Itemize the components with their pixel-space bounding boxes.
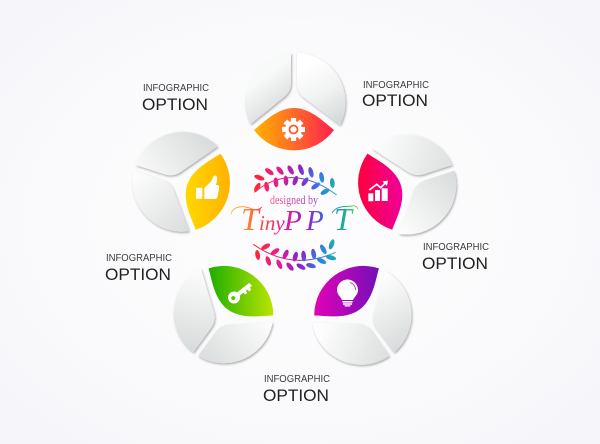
text: Tiny PPT: T <box>241 201 261 237</box>
label: option top-right <box>362 80 429 110</box>
circle 2: right pink <box>348 122 469 239</box>
label: option top-right: INFOGRAPHIC <box>363 80 429 91</box>
icon: light bulb <box>337 280 358 306</box>
laurel: bottom <box>253 239 337 272</box>
label: option left: INFOGRAPHIC <box>106 253 172 264</box>
circle 5: bottom-right purple <box>302 252 431 384</box>
text: Tiny PPT: T <box>334 201 354 237</box>
text: Tiny PPT: P <box>305 205 324 237</box>
label: option top-left <box>142 83 209 114</box>
icon: key <box>226 280 255 306</box>
icon: gear <box>282 118 305 141</box>
circle 1: top orange <box>246 53 345 150</box>
label: option right: OPTION <box>422 255 488 273</box>
text: Tiny PPT: iny <box>259 211 285 235</box>
label: option bottom <box>263 374 330 405</box>
label: option top-left: INFOGRAPHIC <box>143 83 209 94</box>
text: Tiny PPT: P <box>283 205 302 237</box>
icon: bar chart with arrow <box>368 180 388 201</box>
label: option bottom: INFOGRAPHIC <box>264 374 330 385</box>
circle 3: left yellow <box>120 119 240 236</box>
label: option left: OPTION <box>105 266 171 284</box>
label: option right: INFOGRAPHIC <box>423 242 489 253</box>
text: designed by: designed by <box>270 193 319 207</box>
label: option left <box>105 253 172 284</box>
label: option bottom: OPTION <box>263 387 329 405</box>
flourish strokes <box>231 206 358 214</box>
label: option top-right: OPTION <box>362 92 428 110</box>
circle 4: bottom-left green <box>154 252 285 383</box>
logo: designed by TinyPPT <box>231 164 358 272</box>
label: option top-left: OPTION <box>142 96 208 114</box>
icon: thumbs up <box>196 176 219 199</box>
label: option right <box>422 242 489 273</box>
laurel: top <box>253 164 337 196</box>
